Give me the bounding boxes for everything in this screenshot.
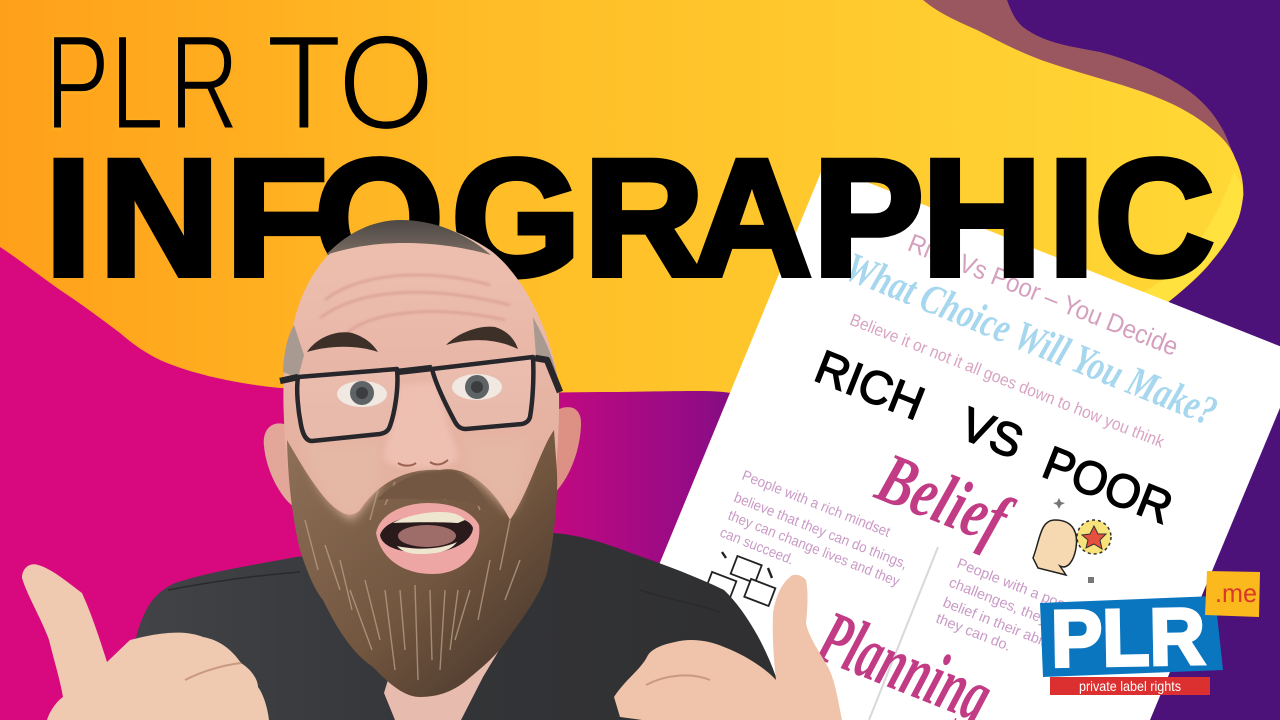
right ear [550,407,581,497]
logo .me text: .me [1215,578,1257,608]
mustache [377,470,492,512]
title [45,6,1214,311]
left eye [337,381,387,407]
rich mindset paragraph: believe that they can do things, [732,490,909,573]
center divider [869,547,938,720]
logo tagline: private label rights [1079,678,1181,694]
background: light yellow blob edge [1140,172,1243,303]
logo yellow .me square [1205,571,1260,617]
title line: PLR: PLR [45,7,239,159]
upper teeth [393,512,465,523]
rich vs poor headline [808,339,1180,534]
infographic paper sheet [595,165,1280,720]
beard strands [305,476,520,680]
lip skin [376,503,479,574]
left hand [22,564,269,720]
nose [384,382,458,468]
head [283,221,559,570]
poor mindset paragraph: People with a poor mindset see [955,556,1149,645]
right cheek highlight [465,440,528,512]
left eyebrow [307,332,378,352]
right eyebrow [446,327,518,349]
lower teeth [397,542,457,554]
beard [287,430,557,697]
rich mindset paragraph [718,468,909,590]
hair [326,220,491,255]
logo blue panel [1040,596,1223,677]
shirt [120,533,800,720]
title line: INFOGRAPHIC: INFOGRAPHIC [45,126,1214,311]
side hair [283,317,560,392]
icon: small sparkles [1053,498,1094,583]
title line: TO: TO [266,6,435,158]
rich vs poor headline: POOR [1036,435,1180,534]
rich mindset paragraph: they can change lives and they [726,508,902,590]
background: brown wave band [915,0,1236,180]
rich vs poor headline: VS [953,397,1031,469]
poor mindset paragraph: they can do. [934,611,1013,655]
background: yellow orange blob [0,0,1243,420]
paper subheading: Believe it or not it all goes down to how you think [847,310,1167,452]
poor mindset paragraph: challenges, they doubt [947,575,1087,643]
icon: head with star [1033,520,1111,575]
glasses [280,357,560,441]
paper background [595,165,1280,720]
forehead wrinkles [320,275,510,335]
right hand [614,575,842,720]
poor mindset paragraph: belief in their ability and [941,595,1087,666]
left cheek highlight [304,445,380,520]
rich mindset paragraph: People with a rich mindset [740,468,892,541]
icon: speech bubbles [705,552,775,606]
paper heading: Rich Vs Poor – You Decide [904,227,1183,362]
presenter [22,220,842,720]
shirt shoulder seam [168,572,720,612]
rich mindset paragraph: can succeed. [718,525,796,568]
rich vs poor headline: RICH [808,339,932,430]
left ear [264,423,294,507]
neck [384,612,522,720]
mouth opening [380,515,473,553]
right eye [452,374,502,400]
PLR.me logo [1040,571,1260,695]
logo PLR lettering: PLR [1050,592,1206,683]
belief heading: Belief [866,437,1023,562]
logo red tagline bar [1050,677,1210,695]
mouth [376,503,479,574]
tongue [398,525,456,547]
